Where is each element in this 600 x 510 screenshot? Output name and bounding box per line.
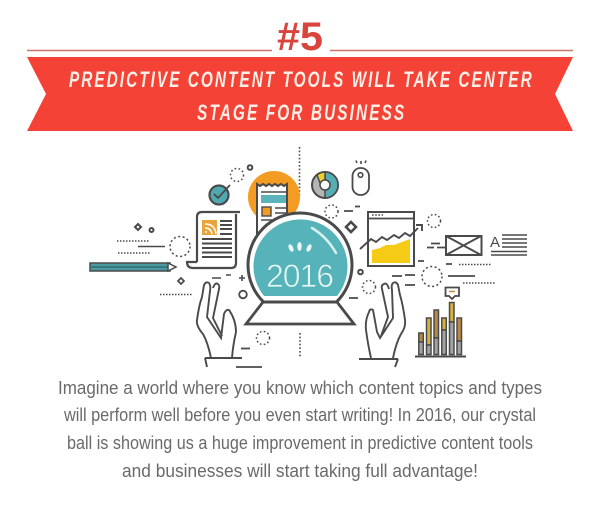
left decorative marks — [117, 224, 190, 256]
icon: speech tag — [446, 288, 459, 299]
right hand — [359, 282, 405, 367]
icon: check badge — [210, 185, 230, 204]
small dotted circle — [230, 168, 244, 182]
bar chart — [415, 302, 466, 356]
icon: browser chart window — [360, 212, 422, 266]
top dotted line — [298, 147, 300, 197]
icon: text lines — [490, 234, 527, 255]
paragraph line 4: and businesses will start taking full advantage! — [122, 461, 478, 481]
banner title line 2: STAGE FOR BUSINESS — [197, 101, 404, 126]
paragraph line 1: Imagine a world where you know which content topics and types — [58, 378, 542, 398]
icon: receipt — [257, 184, 287, 240]
crystal ball — [248, 213, 352, 302]
small ring — [248, 165, 252, 170]
ribbon banner — [27, 57, 573, 131]
trend arrow — [360, 225, 422, 249]
heading number: #5 — [277, 15, 323, 59]
body paragraph — [58, 378, 542, 481]
icon: text lines: A — [490, 234, 500, 251]
icon: pencil — [90, 263, 176, 271]
crystal ball stand — [246, 302, 354, 324]
orange circle — [248, 171, 300, 223]
left heading rule — [27, 50, 272, 52]
icon: rss document — [187, 212, 240, 268]
icon: donut chart — [312, 172, 338, 198]
right heading rule — [330, 50, 573, 52]
icon: envelope — [427, 236, 482, 255]
decorative marks around right side — [349, 261, 496, 298]
crystal ball illustration — [90, 147, 527, 367]
paragraph line 3: ball is showing us a huge improvement in predictive content tools — [67, 433, 533, 453]
paragraph line 2: will perform well before you even start writing! In 2016, our crystal — [63, 405, 536, 425]
left hand — [197, 282, 242, 367]
right decorative marks — [325, 205, 440, 232]
banner title line 1: PREDICTIVE CONTENT TOOLS WILL TAKE CENTER — [69, 68, 532, 93]
year label: 2016 — [266, 258, 334, 294]
decorative marks around left hand — [160, 275, 300, 367]
icon: mouse — [352, 160, 369, 195]
